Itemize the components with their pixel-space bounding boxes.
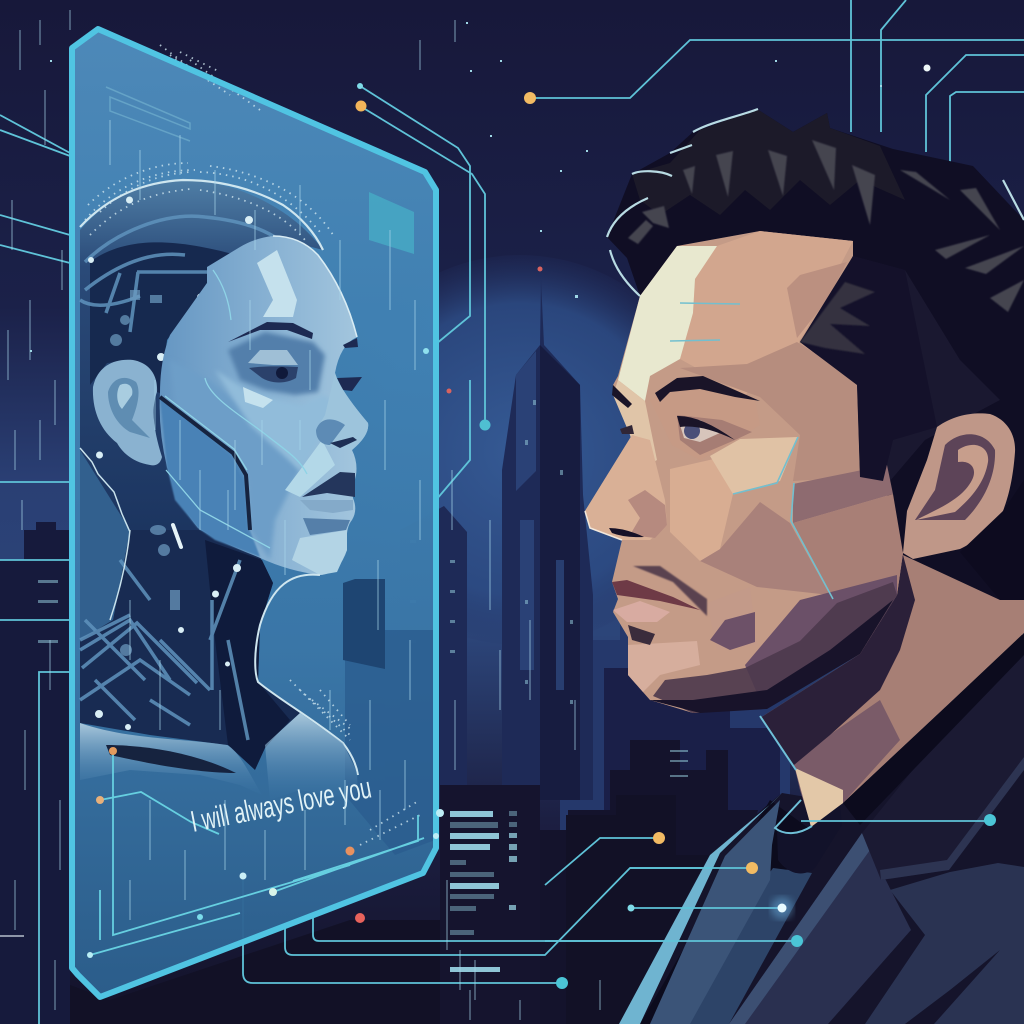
- iris: [684, 423, 700, 439]
- lower side: [793, 494, 903, 603]
- eye white: [680, 420, 722, 442]
- cheek highlight: [243, 387, 273, 408]
- ear: [93, 360, 162, 465]
- building in panel: [343, 579, 385, 669]
- eyelid: [248, 350, 298, 365]
- light cheek: [670, 456, 733, 561]
- ear fold: [916, 445, 988, 520]
- eyelid: [677, 416, 735, 440]
- eyebrow: [228, 322, 313, 342]
- neck mid: [794, 700, 900, 825]
- message text: I will always love you: [188, 772, 374, 839]
- city in panel: [80, 620, 435, 855]
- eyebrow: [655, 376, 760, 402]
- nose: [316, 373, 368, 450]
- chin: [292, 530, 347, 575]
- frame details: [106, 87, 190, 141]
- lower lip: [613, 601, 670, 622]
- hair behind ear shade: [960, 480, 1024, 600]
- neck light: [795, 768, 843, 827]
- forehead highlight: [257, 250, 297, 317]
- eye socket: [228, 332, 325, 395]
- upper lip: [612, 580, 700, 610]
- face base: [585, 231, 903, 713]
- lower cheek: [707, 587, 757, 650]
- face highlight rim: [273, 236, 357, 337]
- glowing nodes: [355, 64, 996, 989]
- cheek mid tone: [170, 360, 300, 560]
- rain: [8, 10, 600, 1020]
- mid cheek: [700, 502, 830, 595]
- nose side shade: [628, 490, 667, 538]
- far brow: [343, 338, 358, 348]
- chin light: [628, 641, 700, 692]
- cheek facet: [710, 612, 755, 650]
- turtleneck: [777, 805, 842, 873]
- crown dark: [90, 242, 260, 393]
- forehead mid: [680, 231, 853, 395]
- ear: [903, 413, 1015, 559]
- neck left band: [80, 450, 130, 650]
- neck left outline: [80, 448, 130, 620]
- left lapel fill: [650, 800, 780, 1024]
- lower jacket: [865, 863, 1024, 1024]
- collar line: [760, 716, 812, 833]
- far eye: [620, 425, 634, 434]
- neck outline: [255, 575, 358, 775]
- upper lapel rim: [880, 757, 1024, 880]
- circuit blobs: [110, 290, 180, 656]
- scattered lights: [88, 197, 253, 730]
- moustache: [633, 566, 707, 616]
- black shirt: [640, 800, 811, 1024]
- iris: [276, 367, 288, 379]
- seam cyan: [165, 270, 307, 548]
- upper lapel: [862, 650, 1024, 880]
- beard: [653, 582, 897, 713]
- city skyline: [0, 280, 790, 1024]
- hair rim light: [607, 109, 1024, 636]
- temple facets: [787, 262, 847, 338]
- far brow: [612, 385, 632, 408]
- neck center dark: [205, 540, 290, 770]
- hair back: [607, 109, 1024, 610]
- face cyber lines: [670, 303, 833, 599]
- neck shadow: [760, 555, 915, 765]
- panel dots: [87, 747, 354, 958]
- panel frame: [72, 29, 436, 997]
- jacket: [619, 628, 1024, 1024]
- face seam: [160, 397, 250, 530]
- light cheek: [215, 370, 335, 470]
- neck: [760, 555, 1024, 825]
- right shoulder: [265, 713, 358, 800]
- spray of particles: [85, 45, 420, 845]
- hair strands: [628, 140, 1024, 312]
- panel glass: [72, 29, 436, 997]
- eye socket: [677, 415, 752, 455]
- upper lip: [302, 472, 355, 497]
- ear inner: [915, 434, 995, 520]
- moon glow: [325, 255, 715, 645]
- jaw dark: [650, 600, 893, 713]
- lower lip: [300, 500, 353, 513]
- jacket dark band: [843, 633, 1024, 825]
- forehead highlight: [618, 246, 717, 401]
- eye: [249, 366, 298, 382]
- shirt strip: [661, 868, 812, 1024]
- holographic panel: [72, 29, 436, 997]
- sideburn: [800, 256, 937, 481]
- left lapel: [619, 793, 782, 1024]
- right lapel edge: [729, 833, 870, 1024]
- left shoulder: [80, 723, 262, 795]
- circuit detail: [80, 216, 300, 740]
- cheek highlight: [710, 437, 798, 494]
- woman head circuits: [80, 180, 323, 530]
- lower jaw panel: [160, 397, 260, 557]
- man: [585, 109, 1024, 1024]
- nose: [585, 435, 667, 540]
- small screen square: [369, 192, 414, 254]
- shoulder slot: [106, 745, 236, 773]
- nose rim: [585, 511, 622, 540]
- data bars: [450, 811, 517, 972]
- nostril: [609, 528, 644, 537]
- hair mid tone: [632, 109, 905, 215]
- chin shadow: [628, 625, 655, 645]
- bridge light: [613, 380, 657, 470]
- upper side: [680, 342, 860, 481]
- neck: [80, 530, 300, 745]
- dark cheek band: [793, 465, 893, 523]
- white tube: [173, 525, 181, 547]
- head dome highlight: [80, 180, 323, 250]
- woman face: [160, 236, 368, 575]
- circuit lines over man: [545, 821, 990, 941]
- far eye: [337, 377, 362, 391]
- jaw purple: [745, 575, 897, 700]
- stars: [30, 22, 882, 352]
- sideburn highlights: [800, 282, 875, 354]
- under lip: [303, 518, 350, 535]
- eye area shade: [650, 376, 760, 460]
- panel circuits: [90, 752, 424, 955]
- lower cheek highlight: [285, 440, 335, 497]
- nostril: [330, 437, 357, 448]
- nose shade: [316, 419, 345, 445]
- right lapel: [729, 833, 911, 1024]
- hair lower shade: [800, 256, 1000, 481]
